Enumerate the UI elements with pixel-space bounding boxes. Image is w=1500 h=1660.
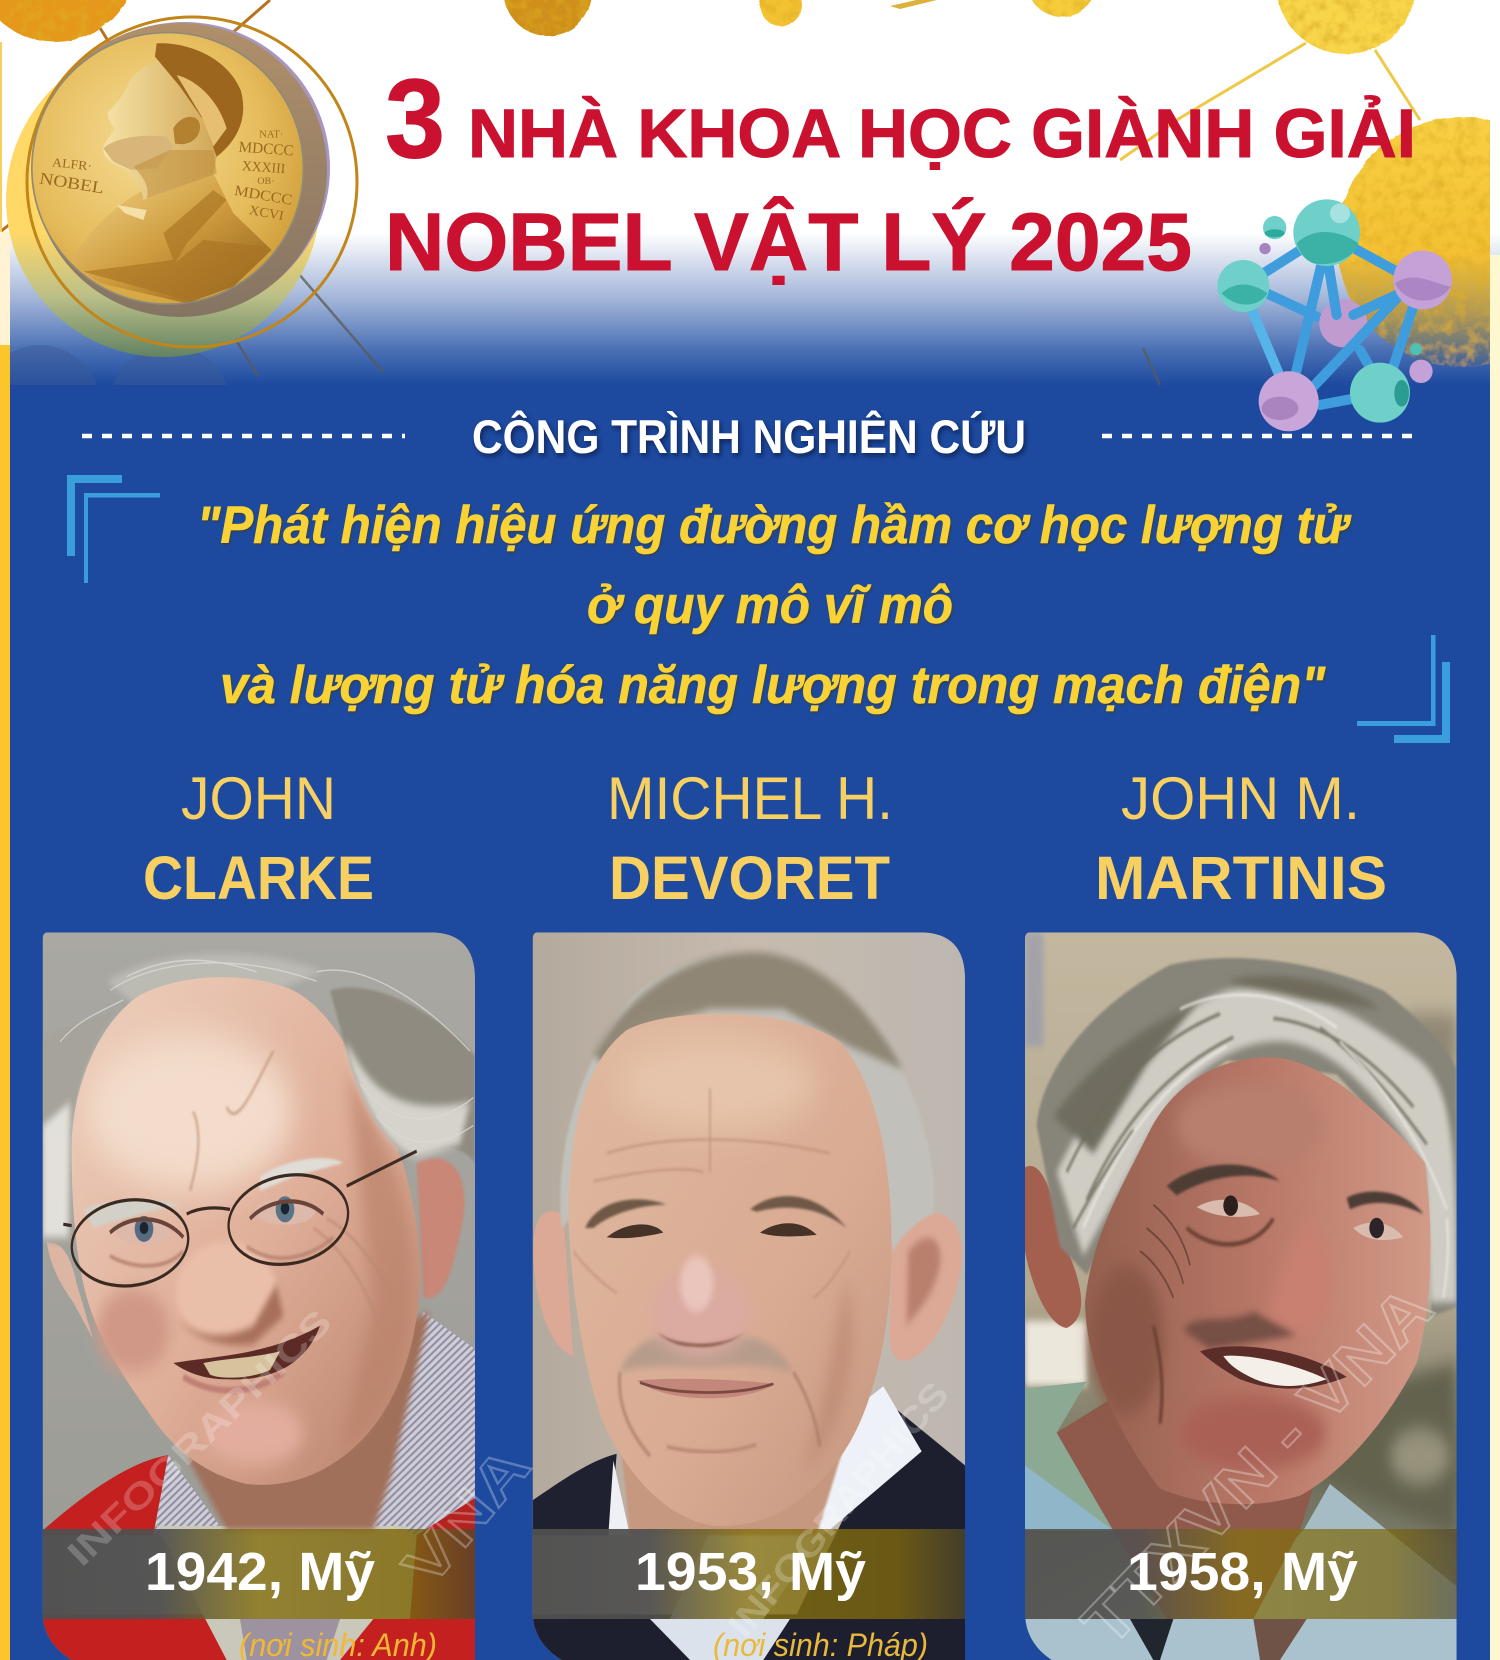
face [1085, 1057, 1430, 1504]
neck [187, 1312, 430, 1531]
year bar: 1958 [1025, 1529, 1457, 1619]
portrait: John M. Martinis [1020, 930, 1460, 1660]
sweater and shirt [533, 1454, 617, 1535]
icon: molecule [1217, 199, 1452, 431]
medal inscriptions: MDCCC [238, 139, 294, 159]
brows and eyes [1167, 1164, 1280, 1195]
hair [560, 953, 934, 1251]
quote text [197, 496, 1352, 715]
title line 1 [385, 56, 1416, 181]
nose [657, 1278, 746, 1362]
portrait: Michel H. Devoret [530, 930, 970, 1660]
name: Michel H. Devoret: MICHEL H. [607, 765, 893, 832]
eyes [115, 1216, 172, 1244]
face [568, 1014, 892, 1526]
year bar: 1942: 1942, Mỹ [145, 1542, 375, 1602]
medal inscriptions: MDCCC [233, 183, 293, 209]
watermark [59, 1272, 1447, 1660]
icon: Nobel medal [6, 17, 357, 357]
name: John Clarke: CLARKE [143, 844, 374, 912]
gold molecule decoration in header [0, 0, 1500, 465]
medal inscriptions: OB· [257, 177, 275, 187]
right edge strip [1490, 255, 1500, 1660]
icon: opening bracket [67, 475, 160, 583]
quote text: ở quy mô vĩ mô [587, 576, 953, 635]
medal inscriptions [38, 129, 294, 223]
quote text: và lượng tử hóa năng lượng trong mạch điện" [220, 656, 1326, 715]
title line 1: NHÀ KHOA HỌC GIÀNH GIẢI [468, 95, 1416, 172]
year bar: 1958: 1958, Mỹ [1127, 1542, 1358, 1602]
medal portrait bust [72, 173, 272, 303]
mouth [173, 1326, 320, 1379]
medal inscriptions: NAT· [259, 129, 283, 140]
face [72, 977, 420, 1485]
brows [83, 1200, 180, 1228]
portrait: John Clarke [40, 930, 480, 1660]
ear [1025, 1166, 1081, 1328]
shirt and sweater [372, 1312, 475, 1535]
neck [621, 1452, 844, 1536]
icon: closing bracket [1357, 635, 1450, 743]
moustache shade and nose shadow [1183, 1312, 1297, 1349]
section heading: research work: CÔNG TRÌNH NGHIÊN CỨU [472, 410, 1026, 463]
hair strands [1067, 1014, 1427, 1228]
medal inscriptions: XCVI [248, 202, 285, 223]
medal inscriptions: ALFR· [51, 155, 93, 173]
medal inscriptions: NOBEL [38, 169, 105, 197]
mouth [637, 1379, 775, 1398]
quote text: "Phát hiện hiệu ứng đường hầm cơ học lượng tử [197, 496, 1352, 555]
name: John Clarke [143, 765, 374, 912]
watermark: TTXVN - VNA [1068, 1272, 1447, 1660]
hair right [330, 988, 475, 1163]
title line 1: 3 [385, 56, 445, 181]
brows and eyes [585, 1199, 667, 1228]
ears [533, 1211, 573, 1356]
title line 2: NOBEL VẬT LÝ 2025 [385, 197, 1192, 288]
left edge strip [0, 42, 10, 1660]
glasses [63, 1151, 417, 1291]
name: Michel H. Devoret: DEVORET [609, 844, 890, 912]
name: John M. Martinis [1095, 765, 1387, 912]
nose [177, 1242, 277, 1344]
year bar: 1942 [43, 1529, 475, 1619]
year bar: 1953: 1953, Mỹ [635, 1542, 866, 1602]
year bar: 1953 [533, 1529, 965, 1619]
neck [1056, 1401, 1313, 1619]
smile [1200, 1346, 1347, 1389]
hair wisps [60, 960, 473, 1142]
hair left [42, 1027, 101, 1246]
ear [417, 1158, 464, 1298]
watermark: VNA [390, 1434, 543, 1598]
shirt [1025, 1382, 1113, 1531]
name: John M. Martinis: JOHN M. [1121, 765, 1360, 832]
watermark: INFOGRAPHICS [59, 1301, 339, 1574]
name: Michel H. Devoret [607, 765, 893, 912]
name: John M. Martinis: MARTINIS [1095, 844, 1387, 912]
hair [1037, 958, 1457, 1316]
medal inscriptions: XXXIII [241, 159, 286, 177]
watermark: INFOGRAPHICS [720, 1374, 957, 1645]
name: John Clarke: JOHN [181, 765, 336, 832]
